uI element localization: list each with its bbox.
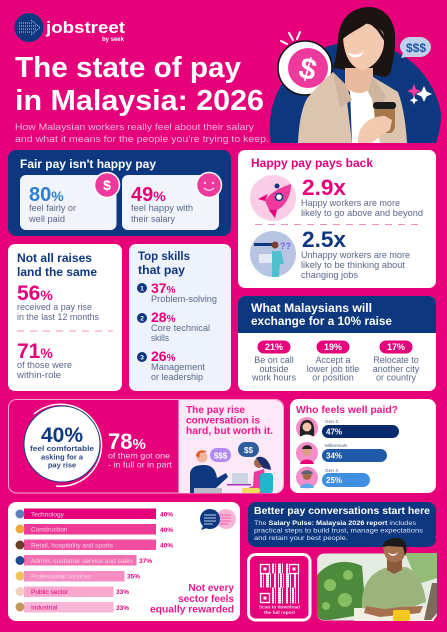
option: on call: outside [259,364,289,374]
heading: Better pay conversations start here [254,505,430,517]
stat: 2.5x: 2.5x [302,227,347,252]
stat: 40% circle: 40% [41,424,83,447]
row: Gen X [296,466,370,488]
bar: Retail: Retail, hospitality and sports [31,542,114,550]
caption: equally rewarded [150,604,234,616]
row: Millennials: Millennials [325,443,348,449]
bar: Public sector: Public sector [31,589,69,596]
subtitle: How Malaysian workers really feel about their salary [15,122,254,133]
heading: Not all raises [17,253,92,265]
stat: 56%: 56% [17,282,53,305]
card: 80%: 80% [29,184,64,206]
option: on call: work hours [251,372,297,382]
body text: practical steps to build trust, manage expectations [254,528,424,534]
card: 49%: feel happy with [131,203,193,213]
skill 2: Core technical [151,323,210,333]
bar: Admin: Admin, customer service and sales [31,558,134,565]
stat: 78% [108,429,173,470]
bar: Industrial: Industrial [31,604,58,612]
bar: Construction: Construction [31,526,68,534]
option: relocate: Relocate to [373,355,419,365]
body text [254,520,424,542]
stat: 2.5x: Unhappy workers are more [301,250,410,260]
option: lower title: or position [312,372,354,382]
icon: rocket [250,175,296,221]
illustration: two people talking [190,442,273,493]
heading [138,251,190,277]
caption: Scan to download [259,604,300,610]
bar: Industrial: 33% [116,605,129,612]
card: 49%: 49% [131,184,166,206]
stat: 71% [16,340,72,380]
skill 1: 1 [140,286,144,292]
bar: Professional services: Professional services [31,574,92,580]
stat: 2.9x: 2.9x [302,175,347,200]
option: relocate: 17% [387,342,405,352]
icon: $$$ bubble: $$$ [406,41,426,55]
bar: Technology: Technology [31,512,65,518]
logo: by seek [102,37,125,43]
icon: sparkles [407,84,432,105]
stat: 2.5x [301,227,410,280]
bar: Public sector: 33% [116,589,129,596]
skill 1 [137,280,217,304]
skill 1: 37% [151,280,176,296]
heading [17,253,97,279]
skill 2: 28% [151,309,176,325]
illustration: two people talking: $$$ [214,452,228,460]
caption: sector feels [178,594,234,605]
stat: 2.9x: likely to go above and beyond [301,208,423,218]
skill 3: or leadership [151,372,203,382]
panel: who feels well paid [290,399,436,493]
heading: Top skills [138,251,190,263]
card: 80%: feel fairly or [29,203,76,213]
bar: Professional services [16,571,140,582]
icon: smile badge [196,172,222,198]
stat: 71%: 71% [17,340,53,363]
icon: dollar badge [94,172,120,198]
panel: pay rise conversation [8,400,284,493]
heading: Happy pay pays back [251,158,374,170]
subtitle [15,122,269,145]
stat: 78%: - in full or in part [108,460,173,470]
bar: Professional services: 35% [127,574,140,580]
panel: not all raises land the same [8,244,122,391]
row: Gen Z [296,417,399,439]
bar: Technology [16,508,173,519]
skill 3 [137,348,205,382]
bar: Retail [16,540,173,550]
panel: happy pay pays back [238,150,436,288]
heading: hard, but worth it. [186,425,273,437]
bar: Construction: 40% [160,527,173,534]
card: 49%: their salary [131,214,175,224]
option: relocate: another city [373,364,420,374]
stat: 2.5x: changing jobs [301,270,359,280]
body text: The Salary Pulse: Malaysia 2026 report includes [254,520,417,527]
row: Gen X: Gen X [325,468,339,474]
caption: the full report [264,610,295,616]
option: relocate [373,340,420,382]
stat: 2.9x: Happy workers are more [301,198,400,208]
heading: land the same [17,267,97,279]
option: on call: Be on call [254,355,294,365]
subtitle: and what it means for the people you're trying to keep. [15,134,269,145]
heading: The pay rise [186,404,245,416]
header illustration: woman with coffee: $ [295,51,320,88]
option: relocate: or country [376,372,417,382]
option: on call [251,340,297,382]
QR code [260,564,299,602]
title [15,52,264,117]
option: on call: 21% [265,342,283,352]
skill 3: 26% [151,348,176,364]
caption [259,604,300,616]
skill 3: Management [151,362,205,372]
bar: Public sector [16,586,129,597]
body text: and retain your best people. [254,535,348,542]
bar: Technology: 40% [160,512,173,518]
icon: confused worker: ?? [280,241,291,251]
skill 3: 3 [140,354,144,362]
bar: Admin [16,555,152,566]
panel: what Malaysians will exchange [238,296,436,391]
bar: Construction [16,524,173,534]
stat: 2.9x [301,175,423,218]
option: lower title: 19% [324,342,342,352]
stat: 56%: in the last 12 months [17,312,99,322]
icon: dollar badge: $ [103,177,111,193]
heading: Fair pay isn't happy pay [20,159,157,171]
row: Gen Z: 47% [326,428,342,436]
header illustration: woman with coffee [270,7,441,143]
bar: Industrial [16,602,129,612]
icon: $$$ bubble [400,37,431,58]
row: Millennials [296,442,387,464]
heading: Who feels well paid? [296,404,398,416]
skill 1: Problem-solving [151,294,217,304]
card: 80% [20,175,116,230]
stat: 78%: of them got one [108,450,170,460]
stat: 40% circle: asking for a [41,452,84,462]
caption: Not every [188,583,234,594]
stat: 56% [17,282,99,322]
panel: fair pay isn't happy pay [8,150,231,236]
heading [186,404,273,437]
icon: chat bubbles [200,509,236,530]
bar: Admin: 37% [139,558,152,565]
title: The state of pay [15,52,241,84]
skill 2 [137,309,210,343]
photo: smiling man at desk [317,538,437,621]
stat: 40% circle: feel comfortable [30,444,94,453]
row: Millennials: 34% [326,452,342,460]
row: Gen X: 25% [326,476,342,485]
stat: 2.5x: likely to be thinking about [301,260,406,270]
stat: 78%: 78% [108,429,146,454]
title: in Malaysia: 2026 [15,85,264,117]
card: 80%: well paid [28,214,65,224]
icon: confused worker [250,231,296,277]
caption [150,583,234,616]
heading: conversation is [186,414,260,426]
option: lower title: lower job title [307,364,359,374]
heading [251,303,392,328]
skill 2: 2 [140,316,144,322]
option: lower title [307,340,359,382]
stat: 40% circle [24,404,102,486]
QR code card [248,554,310,620]
logo: jobstreet [45,18,125,37]
panel: better pay conversations [248,502,436,547]
stat: 71%: of those were [17,360,72,370]
logo [14,13,125,43]
heading: exchange for a 10% raise [251,316,392,328]
stat: 56%: received a pay rise [17,302,92,312]
stat: 71%: within-role [16,370,61,380]
panel: top skills that pay [129,244,231,391]
heading: that pay [138,265,186,277]
heading: What Malaysians will [251,303,372,315]
skill 2: skills [151,333,169,343]
illustration: two people talking: $$ [244,446,253,455]
bar: Retail: 40% [160,542,173,550]
row: Gen Z: Gen Z [325,419,338,425]
option: lower title: Accept a [315,355,351,365]
panel: sector chart [8,502,240,621]
stat: 40% circle: pay rise [48,460,76,470]
card: 49% [122,175,219,230]
